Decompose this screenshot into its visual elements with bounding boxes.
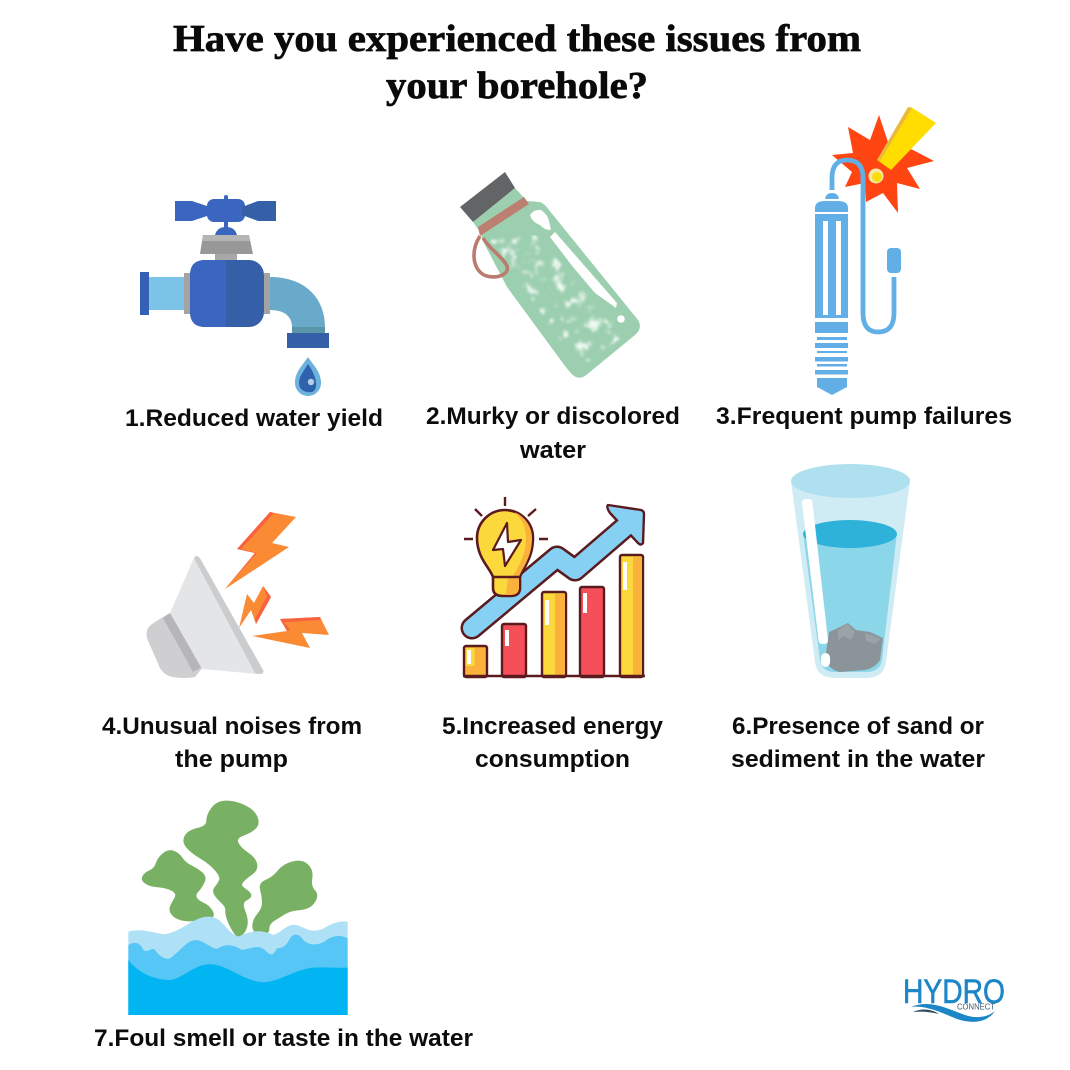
panel: sand or sediment (731, 464, 985, 773)
panel: unusual noises (102, 512, 362, 773)
label 6: sediment in the water (731, 746, 985, 773)
arrow (472, 505, 644, 628)
panel: foul smell or taste (94, 802, 473, 1052)
panel: reduced water yield (125, 195, 383, 432)
label 5: consumption (475, 746, 630, 773)
icon: dripping tap (140, 195, 329, 396)
icon: green fumes over water (128, 802, 348, 1015)
label 7: 7.Foul smell or taste in the water (94, 1025, 473, 1052)
panel: frequent pump failures (716, 107, 1012, 430)
label 2: water (519, 437, 586, 464)
icon: loudspeaker with bolts (147, 512, 329, 678)
logo: Hydro Connect: HYDRO (903, 973, 1005, 1011)
bars (464, 555, 643, 677)
label 1: 1.Reduced water yield (125, 405, 383, 432)
logo: Hydro Connect (903, 973, 1005, 1022)
label 5 (442, 713, 664, 773)
light bulb (477, 510, 533, 596)
panel: increased energy consumption (442, 497, 664, 773)
label 5: 5.Increased energy (442, 713, 664, 740)
label 4: the pump (175, 746, 288, 773)
label 6 (731, 713, 985, 773)
icon: glass with sediment (791, 464, 910, 678)
label 2 (426, 403, 680, 464)
logo: Hydro Connect: CONNECT (957, 1002, 995, 1012)
icon: murky bottle (460, 172, 640, 378)
title: your borehole? (386, 65, 648, 107)
label 3: 3.Frequent pump failures (716, 403, 1012, 430)
label 6: 6.Presence of sand or (732, 713, 984, 740)
icon: energy bulb and rising bar chart (463, 497, 645, 677)
label 4: 4.Unusual noises from (102, 713, 362, 740)
panel: murky or discolored water (426, 172, 680, 464)
label 2: 2.Murky or discolored (426, 403, 680, 430)
icon: submersible pump with spark (815, 107, 936, 395)
title: Have you experienced these issues from (173, 18, 861, 60)
label 4 (102, 713, 362, 773)
title (173, 18, 861, 107)
